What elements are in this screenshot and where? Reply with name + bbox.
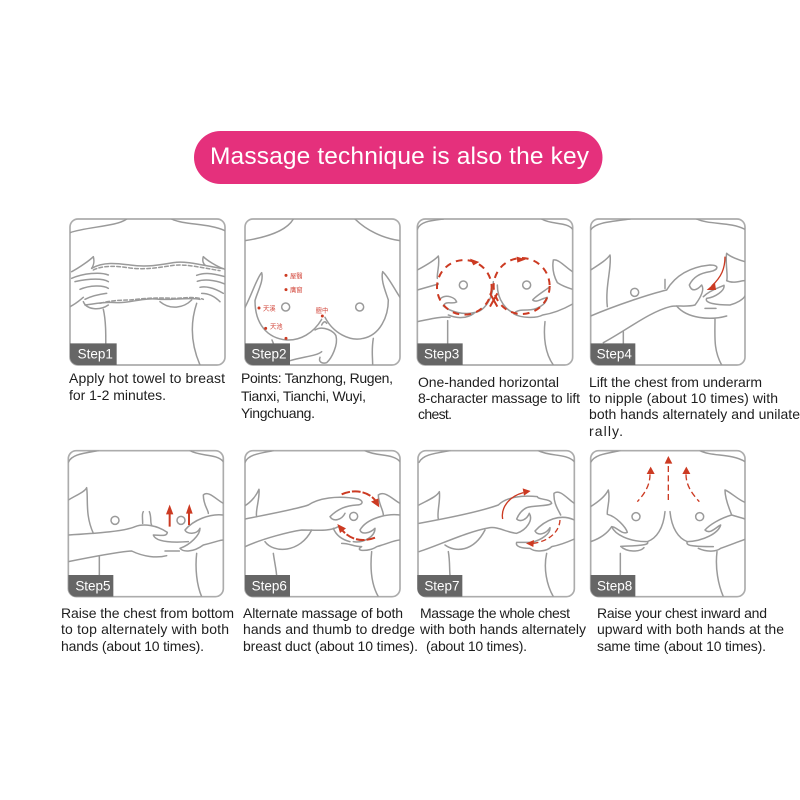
step badge 4: Step4 xyxy=(597,347,632,362)
step 4 text xyxy=(589,374,800,439)
panel: step 5 xyxy=(68,451,223,597)
step badge 8 xyxy=(591,575,635,597)
step 8 text: Raise your chest inward and xyxy=(597,605,767,621)
step 5 text: hands (about 10 times). xyxy=(61,638,204,654)
step badge 5 xyxy=(68,575,113,597)
step badge 2 xyxy=(245,343,290,365)
step badge 1: Step1 xyxy=(78,347,113,362)
red circular arrows xyxy=(502,488,560,547)
acupoints xyxy=(257,272,328,340)
step badge 3: Step3 xyxy=(424,347,459,362)
step 7 text: Massage the whole chest xyxy=(420,605,570,621)
step badge 1 xyxy=(70,343,117,365)
step 2 text xyxy=(241,370,393,421)
step 7 text: (about 10 times). xyxy=(426,638,527,654)
panel: step 2 xyxy=(245,219,400,365)
step 8 text: same time (about 10 times). xyxy=(597,638,766,654)
panel: step 6 xyxy=(245,451,400,597)
panel: step 8 xyxy=(591,451,745,597)
step 4 text: Lift the chest from underarm xyxy=(589,374,762,390)
step badge 6: Step6 xyxy=(252,578,287,593)
step 6 text: hands and thumb to dredge xyxy=(243,621,415,637)
panel: step 7 xyxy=(417,451,574,597)
step 6 text: Alternate massage of both xyxy=(243,605,403,621)
red circular arrows xyxy=(337,491,379,540)
step 2 text: Tianxi, Tianchi, Wuyi, xyxy=(241,388,366,404)
panel: step 4 xyxy=(591,219,745,365)
step 3 text xyxy=(418,374,580,422)
step badge 8: Step8 xyxy=(597,578,632,593)
step 3 text: chest. xyxy=(418,406,452,422)
acupoints: 膻中 xyxy=(316,305,328,314)
title pill: Massage technique is also the key xyxy=(210,143,590,170)
title pill xyxy=(194,131,602,184)
step 3 text: One-handed horizontal xyxy=(418,374,559,390)
step 7 text xyxy=(419,605,586,654)
step badge 6 xyxy=(245,575,290,597)
step 3 text: 8-character massage to lift xyxy=(418,390,580,406)
step badge 7 xyxy=(417,575,462,597)
step 5 text: to top alternately with both xyxy=(61,621,229,637)
step 8 text: upward with both hands at the xyxy=(597,621,784,637)
acupoints: 天溪 xyxy=(263,303,276,312)
acupoints: 屋翳 xyxy=(290,272,303,280)
step 1 text: for 1-2 minutes. xyxy=(69,387,166,403)
red arrow xyxy=(707,257,725,290)
panel: step 1 xyxy=(70,219,225,365)
red arrows up xyxy=(166,504,193,527)
step badge 5: Step5 xyxy=(75,578,111,593)
step 4 text: to nipple (about 10 times) with xyxy=(589,390,778,406)
step 1 text: Apply hot towel to breast xyxy=(69,370,225,386)
red figure-eight path xyxy=(437,257,550,315)
step 8 text xyxy=(597,605,784,654)
step 2 text: Yingchuang. xyxy=(241,405,315,421)
step badge 4 xyxy=(591,343,635,365)
step badge 7: Step7 xyxy=(424,578,460,593)
red arrows upward xyxy=(637,456,699,502)
step 6 text xyxy=(243,605,418,654)
step 1 text xyxy=(69,370,225,403)
step 4 text: rally. xyxy=(589,423,623,439)
step 2 text: Points: Tanzhong, Rugen, xyxy=(241,370,393,386)
step badge 2: Step2 xyxy=(251,347,287,362)
panel: step 3 xyxy=(417,219,573,365)
step 4 text: both hands alternately and unilate xyxy=(589,406,800,422)
acupoints: 膺窗 xyxy=(290,285,303,294)
step 5 text: Raise the chest from bottom xyxy=(61,605,234,621)
step 6 text: breast duct (about 10 times). xyxy=(243,638,418,654)
acupoints: 天池 xyxy=(270,322,283,331)
step 7 text: with both hands alternately xyxy=(419,621,586,637)
step badge 3 xyxy=(417,343,463,365)
step 5 text xyxy=(61,605,234,654)
